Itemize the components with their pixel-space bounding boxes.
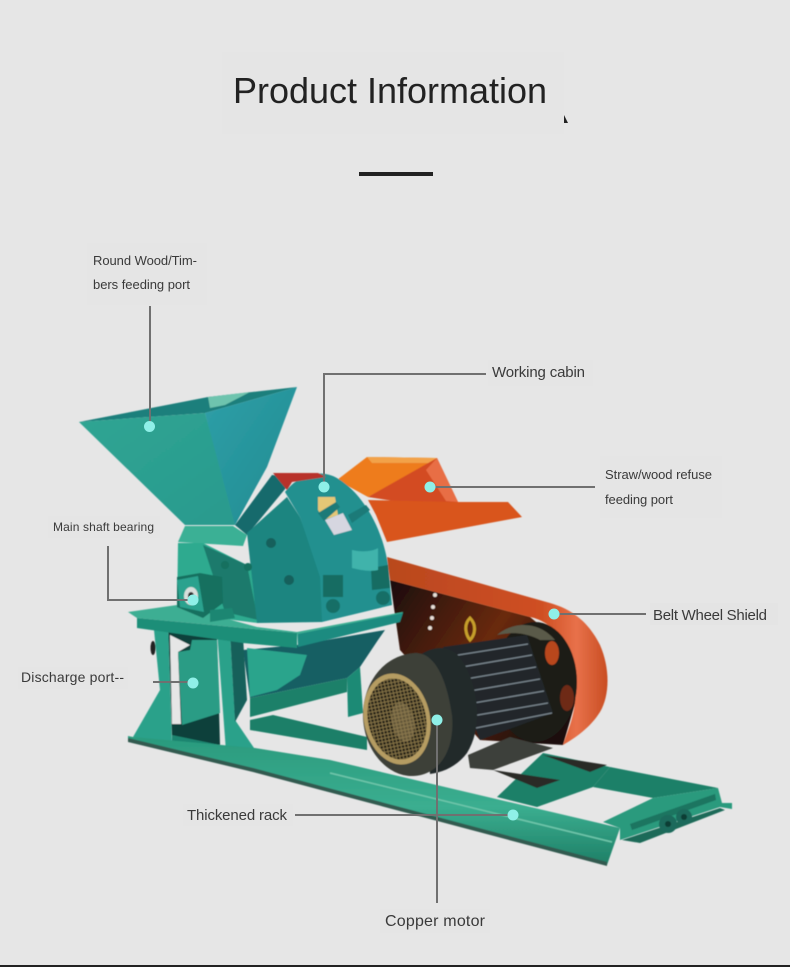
stand panel and legs — [133, 620, 267, 767]
feed throat — [235, 475, 295, 535]
machine illustration — [79, 387, 732, 866]
title: Product Information — [233, 70, 547, 111]
label: belt wheel shield: Belt Wheel Shield — [653, 607, 767, 624]
label: belt wheel shield — [650, 603, 778, 625]
label: thickened rack: Thickened rack — [187, 807, 288, 824]
leader lines — [108, 306, 646, 903]
electric motor — [355, 618, 607, 788]
label: round wood feeding port — [87, 243, 207, 305]
belt wheel shield — [387, 557, 608, 745]
shaft bearing block — [177, 573, 235, 622]
label: main shaft bearing — [48, 516, 160, 538]
label: working cabin: Working cabin — [492, 364, 585, 381]
right frame of base — [497, 753, 732, 843]
label: straw feeding port: feeding port — [605, 492, 673, 507]
feeding hopper — [79, 387, 297, 525]
label: working cabin — [488, 360, 593, 386]
title underline — [359, 172, 433, 176]
label: discharge port — [18, 667, 128, 689]
hopper flange — [178, 526, 247, 546]
callout dots — [144, 421, 560, 820]
label: copper motor — [380, 909, 490, 933]
label: discharge port: Discharge port-- — [21, 669, 124, 685]
title — [222, 52, 564, 134]
label: round wood feeding port: Round Wood/Tim- — [93, 253, 197, 268]
round working cabin housing — [273, 473, 392, 622]
table plate — [128, 605, 403, 648]
label: main shaft bearing: Main shaft bearing — [53, 520, 154, 534]
crusher body — [177, 497, 322, 623]
label: round wood feeding port: bers feeding port — [93, 277, 190, 292]
label: copper motor: Copper motor — [385, 913, 486, 930]
label: straw feeding port: Straw/wood refuse — [605, 467, 712, 482]
orange straw feeding port — [337, 457, 522, 542]
bowl under housing — [243, 630, 385, 750]
main base rail (thickened rack) — [128, 736, 620, 866]
label: straw feeding port — [600, 456, 722, 518]
